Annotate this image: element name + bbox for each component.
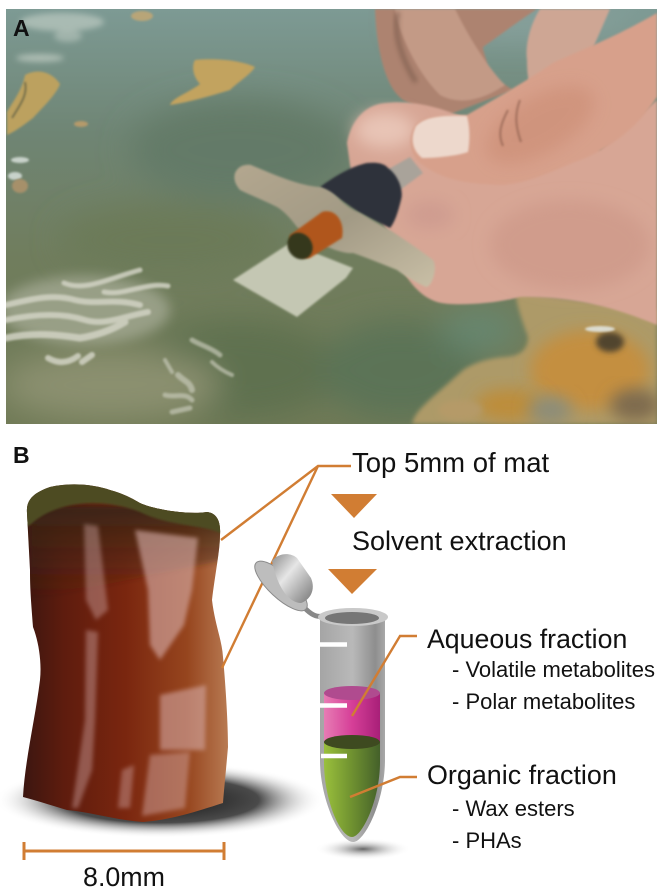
panel B: mat core with shadow <box>0 480 325 838</box>
cored mat in tube <box>290 211 343 258</box>
label B: B <box>13 442 30 468</box>
sampling tool <box>233 163 435 317</box>
inner core shading, clipped to body <box>20 480 225 816</box>
organic fraction heading: Organic fraction <box>427 760 617 790</box>
thumbnail <box>413 116 469 158</box>
pink aqueous layer <box>324 693 380 742</box>
thumb <box>410 13 657 185</box>
scale label: 8.0mm <box>83 862 165 892</box>
far ripples <box>165 340 232 412</box>
leader: organic <box>350 777 417 797</box>
surface ripples haze <box>0 276 170 344</box>
label A: A <box>13 15 30 41</box>
bank of orange mat, bottom right <box>412 292 660 424</box>
metal shaft <box>387 157 423 190</box>
glass slide <box>233 243 353 317</box>
organic items: - PHAs <box>452 828 522 853</box>
surface ripples <box>6 270 168 362</box>
tube shadow <box>315 838 411 860</box>
core ground shadow <box>0 762 325 838</box>
palm and lower hand <box>347 100 657 325</box>
cap hinge <box>302 605 322 616</box>
cap <box>248 554 314 618</box>
small glints at left edge <box>8 157 29 180</box>
green organic layer <box>324 742 380 837</box>
thumb shading <box>490 89 590 161</box>
scale bar <box>24 842 224 860</box>
leader: aqueous <box>352 636 417 716</box>
core body <box>23 484 228 822</box>
metal handle <box>234 165 435 287</box>
leader lines to top 5mm of mat <box>221 466 351 668</box>
floating mat patches <box>7 11 255 193</box>
aqueous items: - Volatile metabolites <box>452 657 655 682</box>
aqueous fraction heading: Aqueous fraction <box>427 624 627 654</box>
tube body <box>320 618 385 842</box>
arrow down 1 <box>331 494 377 518</box>
organic items <box>452 796 575 853</box>
step: solvent extraction: Solvent extraction <box>352 526 567 556</box>
aqueous items: - Polar metabolites <box>452 689 635 714</box>
knuckle creases <box>500 100 521 146</box>
organic items: - Wax esters <box>452 796 575 821</box>
graduation ticks <box>320 644 347 756</box>
dark band below top <box>28 503 220 582</box>
water tones <box>6 15 534 424</box>
rear fingers <box>375 9 610 118</box>
microcentrifuge tube <box>248 554 411 860</box>
arrow down 2 <box>328 569 377 594</box>
green top of core <box>26 484 220 534</box>
heading: top 5mm of mat: Top 5mm of mat <box>352 447 550 478</box>
aqueous items <box>452 657 655 714</box>
black tape roll <box>320 163 402 228</box>
panel A: photo of sampling a mat core by hand <box>0 8 660 424</box>
light reflections <box>72 524 206 816</box>
tube rim <box>318 608 388 626</box>
surface glints top left <box>16 13 104 62</box>
